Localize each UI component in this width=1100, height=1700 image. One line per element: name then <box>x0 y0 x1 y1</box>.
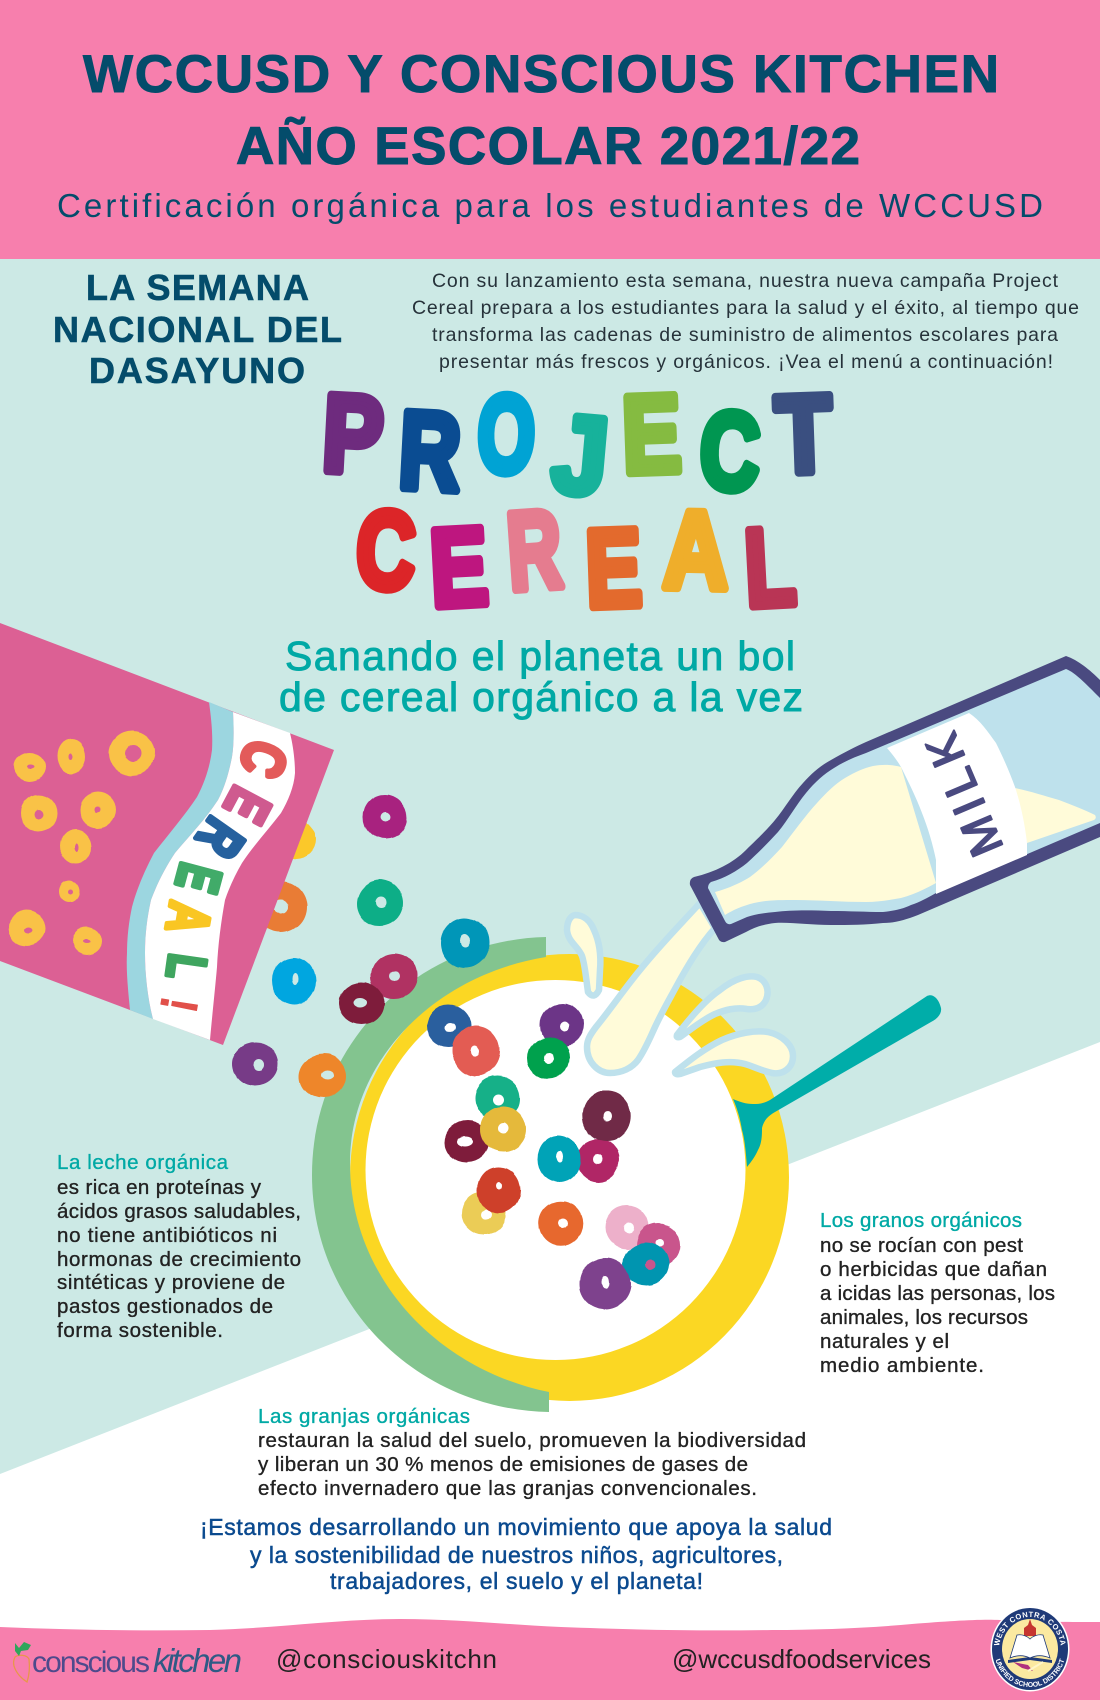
cereal ring: salmon <box>452 1026 500 1076</box>
milk splash: top <box>567 915 600 996</box>
loose falling cereal above bowl <box>232 794 407 1086</box>
closing statement: trabajadores, el suelo y el planeta! <box>330 1568 703 1594</box>
box lettering: E <box>163 857 235 900</box>
cereal ring: teal <box>538 1135 580 1183</box>
box lettering: ! <box>149 993 209 1016</box>
subtitle: Certificación orgánica para los estudiantes de WCCUSD <box>57 187 1043 224</box>
box lettering: A <box>154 897 224 939</box>
logo: Project Cereal lettering: R <box>503 487 566 613</box>
cereal ring: red <box>478 1166 520 1214</box>
heading: national breakfast week: LA SEMANA <box>86 267 309 308</box>
closing statement: y la sostenibilidad de nuestros niños, agricultores, <box>250 1542 783 1568</box>
logo: Project Cereal lettering: P <box>320 372 386 498</box>
logo: Project Cereal lettering: T <box>773 371 834 497</box>
milk splash: middle <box>677 976 768 1037</box>
cereal ring: deep teal <box>623 1242 669 1286</box>
seal: West Contra Costa USD: WEST CONTRA COSTA <box>994 1612 1066 1646</box>
white diagonal background <box>0 1042 1100 1700</box>
bowl interior <box>366 980 746 1360</box>
title line 2: AÑO ESCOLAR 2021/22 <box>236 116 860 176</box>
white label <box>145 712 295 1040</box>
label: organic farms heading: Las granjas orgánicas <box>258 1405 470 1428</box>
text: organic milk: pastos gestionados de <box>57 1295 273 1318</box>
cereal in the air over bowl rim <box>300 918 489 1098</box>
text: organic milk: es rica en proteínas y <box>57 1176 262 1199</box>
logo: Project Cereal lettering: C <box>697 388 763 514</box>
cereal falling behind the box <box>254 821 316 933</box>
icon: schoolhouse <box>1024 1619 1036 1636</box>
tagline: Sanando el planeta un bol <box>285 633 795 679</box>
icon: open book <box>1008 1635 1052 1663</box>
spoon <box>733 995 941 1167</box>
box lettering: E <box>210 776 283 833</box>
text: organic milk: hormonas de crecimiento <box>57 1248 301 1271</box>
text: organic milk <box>57 1151 301 1342</box>
cereal pattern on box <box>9 731 155 955</box>
intro paragraph: transforma las cadenas de suministro de alimentos escolares para <box>432 324 1058 346</box>
milk inside bottle: far end <box>1015 788 1096 843</box>
logo: Project Cereal lettering: R <box>396 388 464 514</box>
milk bottle <box>690 656 1100 942</box>
text: organic grains: medio ambiente. <box>820 1354 984 1377</box>
cereal ring: blue <box>427 1004 471 1048</box>
cereal ring: green <box>357 880 403 926</box>
cereal ring: light pink <box>605 1205 649 1249</box>
cereal box <box>0 623 334 1045</box>
box body <box>0 623 334 1045</box>
cereal ring: gold <box>480 1106 526 1152</box>
logo: Conscious Kitchen <box>14 1642 242 1682</box>
logo: Project Cereal lettering: C <box>353 487 419 613</box>
cereal bowl <box>312 937 789 1412</box>
text: organic grains <box>820 1209 1055 1377</box>
text: organic farms <box>258 1405 806 1500</box>
text: organic grains: no se rocían con pest <box>820 1234 1023 1257</box>
cereal ring: purple <box>540 1003 584 1047</box>
bottle outline <box>690 656 1100 942</box>
bowl shadow <box>312 937 549 1412</box>
logo: Project Cereal lettering: E <box>584 506 644 631</box>
bottle glass <box>708 669 1100 924</box>
text: organic grains: naturales y el <box>820 1330 949 1353</box>
logo: Project Cereal lettering <box>320 371 834 631</box>
text: organic grains: animales, los recursos <box>820 1306 1028 1329</box>
logo: Project Cereal lettering: E <box>620 373 683 497</box>
tagline <box>279 633 803 720</box>
milk stream <box>587 903 715 1073</box>
cereal ring: green <box>528 1036 570 1080</box>
cereal ring: magenta <box>363 794 407 840</box>
box lettering: C <box>226 732 300 786</box>
milk stream and splashes <box>567 903 793 1074</box>
closing statement: ¡Estamos desarrollando un movimiento que apoya la salud <box>200 1514 832 1540</box>
cereal ring: pale gold <box>462 1191 506 1235</box>
cereal ring: teal <box>441 918 489 968</box>
logo: Project Cereal lettering: A <box>662 489 729 613</box>
intro paragraph: presentar más frescos y orgánicos. ¡Vea el menú a continuación! <box>439 351 1053 373</box>
intro paragraph: Con su lanzamiento esta semana, nuestra nueva campaña Project <box>432 270 1059 292</box>
box lettering: L <box>154 950 217 983</box>
social handle: conscious kitchen: @consciouskitchn <box>276 1644 497 1674</box>
text: organic milk: no tiene antibióticos ni <box>57 1224 277 1247</box>
text: organic milk: forma sostenible. <box>57 1319 223 1342</box>
cereal ring: maroon <box>339 982 385 1024</box>
title line 1: WCCUSD Y CONSCIOUS KITCHEN <box>83 45 999 104</box>
logo: Project Cereal lettering: J <box>548 393 613 520</box>
cereal ring: blue <box>272 957 316 1005</box>
text: organic farms: y liberan un 30 % menos de emisiones de gases de <box>258 1453 748 1476</box>
text: organic grains: a icidas las personas, los <box>820 1282 1055 1305</box>
bowl rim <box>350 954 789 1401</box>
text: organic farms: efecto invernadero que las granjas convencionales. <box>258 1477 757 1500</box>
cereal ring: teal green <box>474 1076 520 1120</box>
tagline: de cereal orgánico a la vez <box>279 674 803 720</box>
cereal ring: purple <box>232 1042 278 1086</box>
milk inside bottle <box>715 765 936 915</box>
box lettering: R <box>183 806 256 870</box>
cereal ring: raspberry <box>576 1138 620 1182</box>
wordmark: conscious: conscious <box>32 1646 150 1679</box>
label: organic grains heading: Los granos orgánicos <box>820 1209 1022 1232</box>
icon: carrot <box>14 1642 31 1682</box>
icon: crossed quill and pencil <box>1013 1662 1043 1671</box>
text: organic milk: sintéticas y proviene de <box>57 1271 285 1294</box>
cereal ring: orange <box>300 1054 346 1098</box>
cereal ring: violet <box>579 1258 631 1310</box>
cereal floating in bowl <box>427 1003 680 1310</box>
cereal ring: orange <box>539 1201 583 1245</box>
heading: national breakfast week <box>53 267 342 391</box>
box lettering <box>149 732 300 1016</box>
label text: MILK: MILK <box>915 726 1013 864</box>
bottle label <box>887 713 1027 894</box>
seal: West Contra Costa USD: UNIFIED SCHOOL DISTRICT <box>996 1658 1064 1687</box>
social handle: wccusd food services: @wccusdfoodservices <box>672 1644 931 1674</box>
blue stripe <box>127 702 234 1019</box>
milk splash: lower <box>675 1031 793 1074</box>
closing statement <box>200 1514 832 1594</box>
footer band <box>0 1619 1100 1700</box>
cereal ring: rose <box>636 1223 680 1267</box>
text: organic milk: ácidos grasos saludables, <box>57 1200 301 1223</box>
header band <box>0 0 1100 259</box>
cereal ring: raspberry <box>371 953 417 999</box>
logo: Project Cereal lettering: E <box>427 504 491 630</box>
wordmark: kitchen: kitchen <box>153 1642 242 1679</box>
logo: Project Cereal lettering: O <box>476 371 537 496</box>
cereal ring: dark maroon <box>583 1091 631 1141</box>
cereal ring: maroon <box>445 1121 489 1163</box>
text: organic farms: restauran la salud del suelo, promueven la biodiversidad <box>258 1429 806 1452</box>
intro paragraph <box>412 270 1079 373</box>
heading: national breakfast week: DASAYUNO <box>89 350 305 391</box>
intro paragraph: Cereal prepara a los estudiantes para la salud y el éxito, al tiempo que <box>412 297 1079 319</box>
heading: national breakfast week: NACIONAL DEL <box>53 309 342 350</box>
logo: Project Cereal lettering: L <box>742 504 798 630</box>
text: organic grains: o herbicidas que dañan <box>820 1258 1047 1281</box>
label: organic milk heading: La leche orgánica <box>57 1151 229 1174</box>
seal: West Contra Costa USD <box>990 1608 1070 1692</box>
